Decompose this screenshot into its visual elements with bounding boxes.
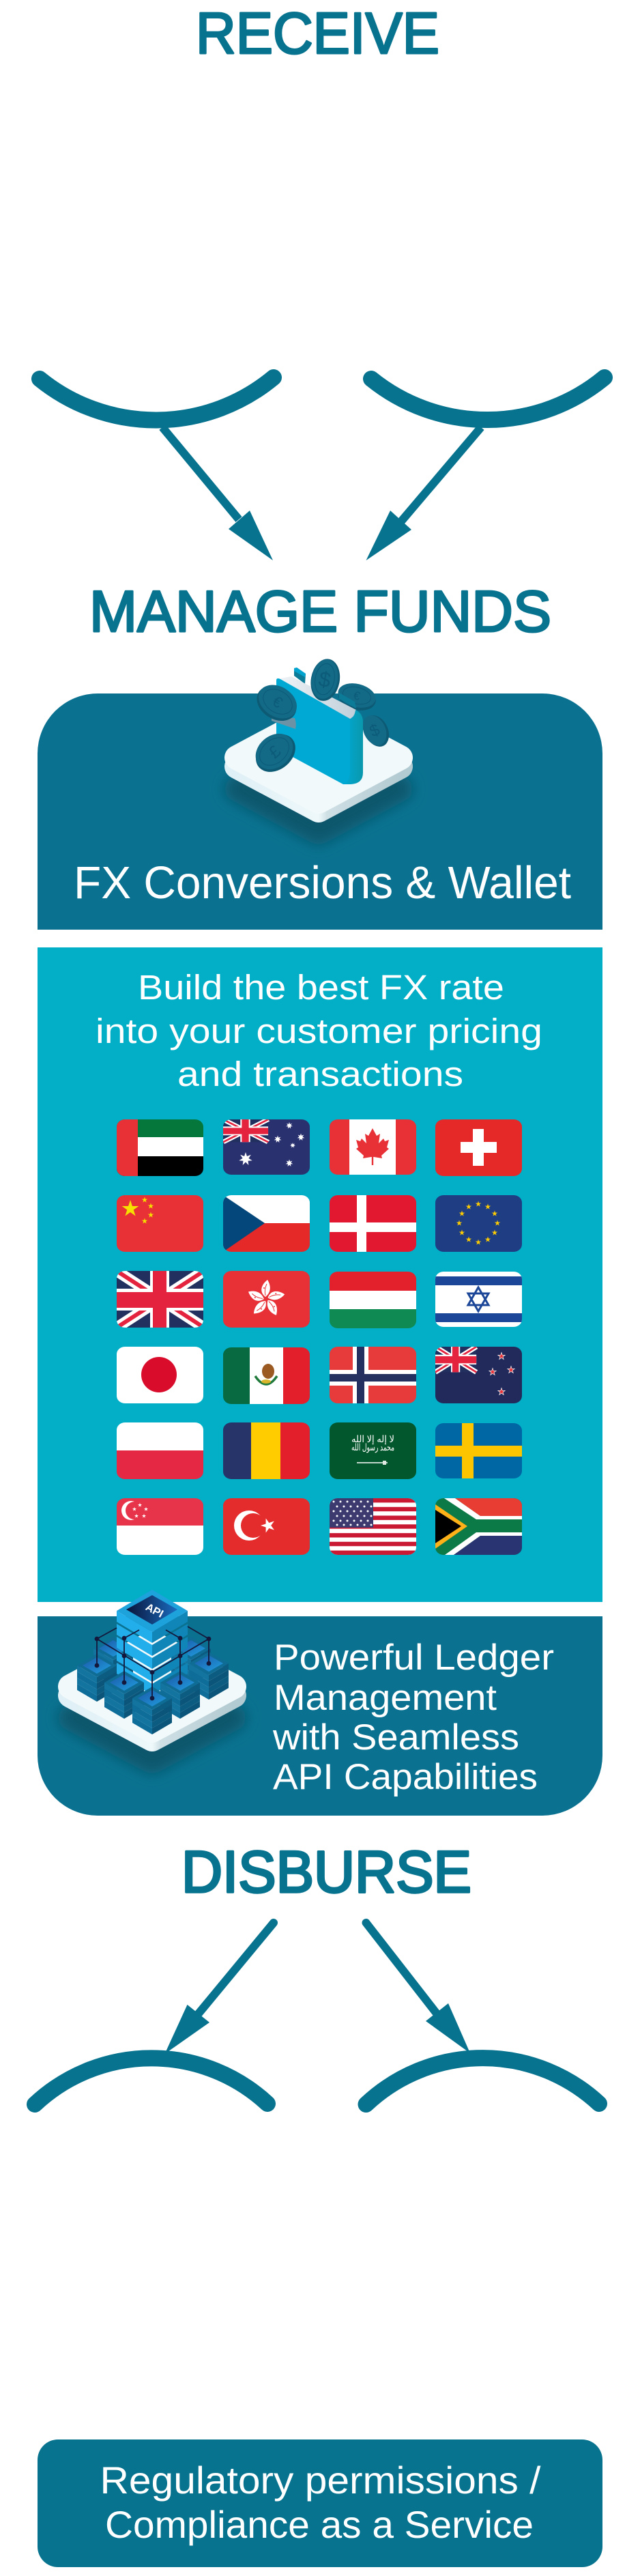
text: Powerful Ledger Management with Seamless API Capabilities: Management [274,1678,497,1718]
left receive arc [40,377,274,420]
coin: euro left [250,678,304,728]
text: Powerful Ledger Management with Seamless API Capabilities: with Seamless [272,1717,519,1758]
API tower slabs: API [143,1601,165,1620]
wire drops and nodes [96,1637,210,1700]
coin: euro behind right [335,680,379,714]
coin: euro behind right: € [352,689,362,703]
text: Powerful Ledger Management with Seamless API Capabilities: Powerful Ledger [274,1637,554,1678]
wallet body [276,678,350,784]
heading: DISBURSE: DISBURSE [181,1840,471,1905]
front servers [77,1652,229,1734]
heading: MANAGE FUNDS: MANAGE FUNDS [89,579,551,644]
flag: United Kingdom [117,1271,204,1328]
flag: Singapore [117,1498,203,1555]
coin: pound bottom left: £ [265,742,285,762]
panel: FX conversions and wallet [38,693,602,930]
flag: Turkey [223,1498,310,1555]
heading: RECEIVE: RECEIVE [196,1,439,66]
right disburse arc [366,2058,599,2104]
wallet loop tag [272,717,296,729]
coin: dollar behind right: $ [366,720,383,741]
arrow: left receive into manage funds [162,427,273,560]
text: Regulatory permissions / Compliance as a Service: Regulatory permissions / [100,2459,541,2502]
arrow: right receive into manage funds [366,427,481,560]
coin: dollar top: $ [317,667,332,692]
text: Build the best FX rate: and transactions [177,1055,463,1093]
text: Powerful Ledger Management with Seamless API Capabilities: API Capabilities [273,1757,538,1797]
flag: Romania [223,1422,310,1479]
flag: Denmark [330,1195,416,1252]
flag: United States [330,1498,416,1555]
flag: Norway [330,1347,416,1403]
coin: euro left: € [270,693,286,711]
flag: Saudi Arabia [330,1422,416,1479]
text: Build the best FX rate: Build the best FX rate [138,968,504,1007]
flag: Sweden [435,1423,522,1480]
text: Build the best FX rate: into your customer pricing [96,1012,542,1050]
panel: ledger management and API [38,1616,602,1816]
flag: Czech Republic [223,1195,310,1252]
flag: Switzerland [435,1119,522,1176]
flag: Hungary [330,1272,416,1328]
text: FX Conversions & Wallet: FX Conversions & Wallet [74,857,571,908]
text: Regulatory permissions / Compliance as a Service: Compliance as a Service [105,2503,534,2546]
coin: dollar top [308,657,343,703]
flag: Israel [435,1272,522,1327]
wallet paper and flap [276,668,356,719]
flag: Mexico [223,1347,310,1404]
coin: pound bottom left [248,726,303,779]
panel: FX rate and currencies [38,947,602,1602]
wire connectors [97,1627,209,1672]
flag: China [117,1195,203,1252]
coin: dollar behind right [358,711,394,751]
flag: Canada [330,1119,416,1175]
flag: South Africa [435,1498,522,1555]
flag: Japan [117,1347,203,1403]
flag: Hong Kong [223,1271,310,1328]
arrow: disburse right [366,1923,470,2053]
flag: Australia [223,1119,310,1175]
icon: API tower with servers on platform [70,1590,234,1762]
flag: European Union [435,1195,522,1252]
flag: Saudi Arabia: محمد رسول الله [351,1442,394,1453]
left disburse arc [35,2058,267,2104]
flag: New Zealand [435,1347,522,1404]
API tower slabs [117,1590,188,1695]
flag: Poland [117,1422,203,1479]
back servers [93,1637,211,1685]
panel: regulatory permissions [38,2439,602,2567]
arrow: disburse left [165,1923,274,2054]
flag: United Arab Emirates [117,1119,203,1176]
flag: Saudi Arabia: لا إله إلا الله [351,1433,394,1445]
icon: wallet with coins on platform [237,657,401,833]
right receive arc [371,377,605,420]
